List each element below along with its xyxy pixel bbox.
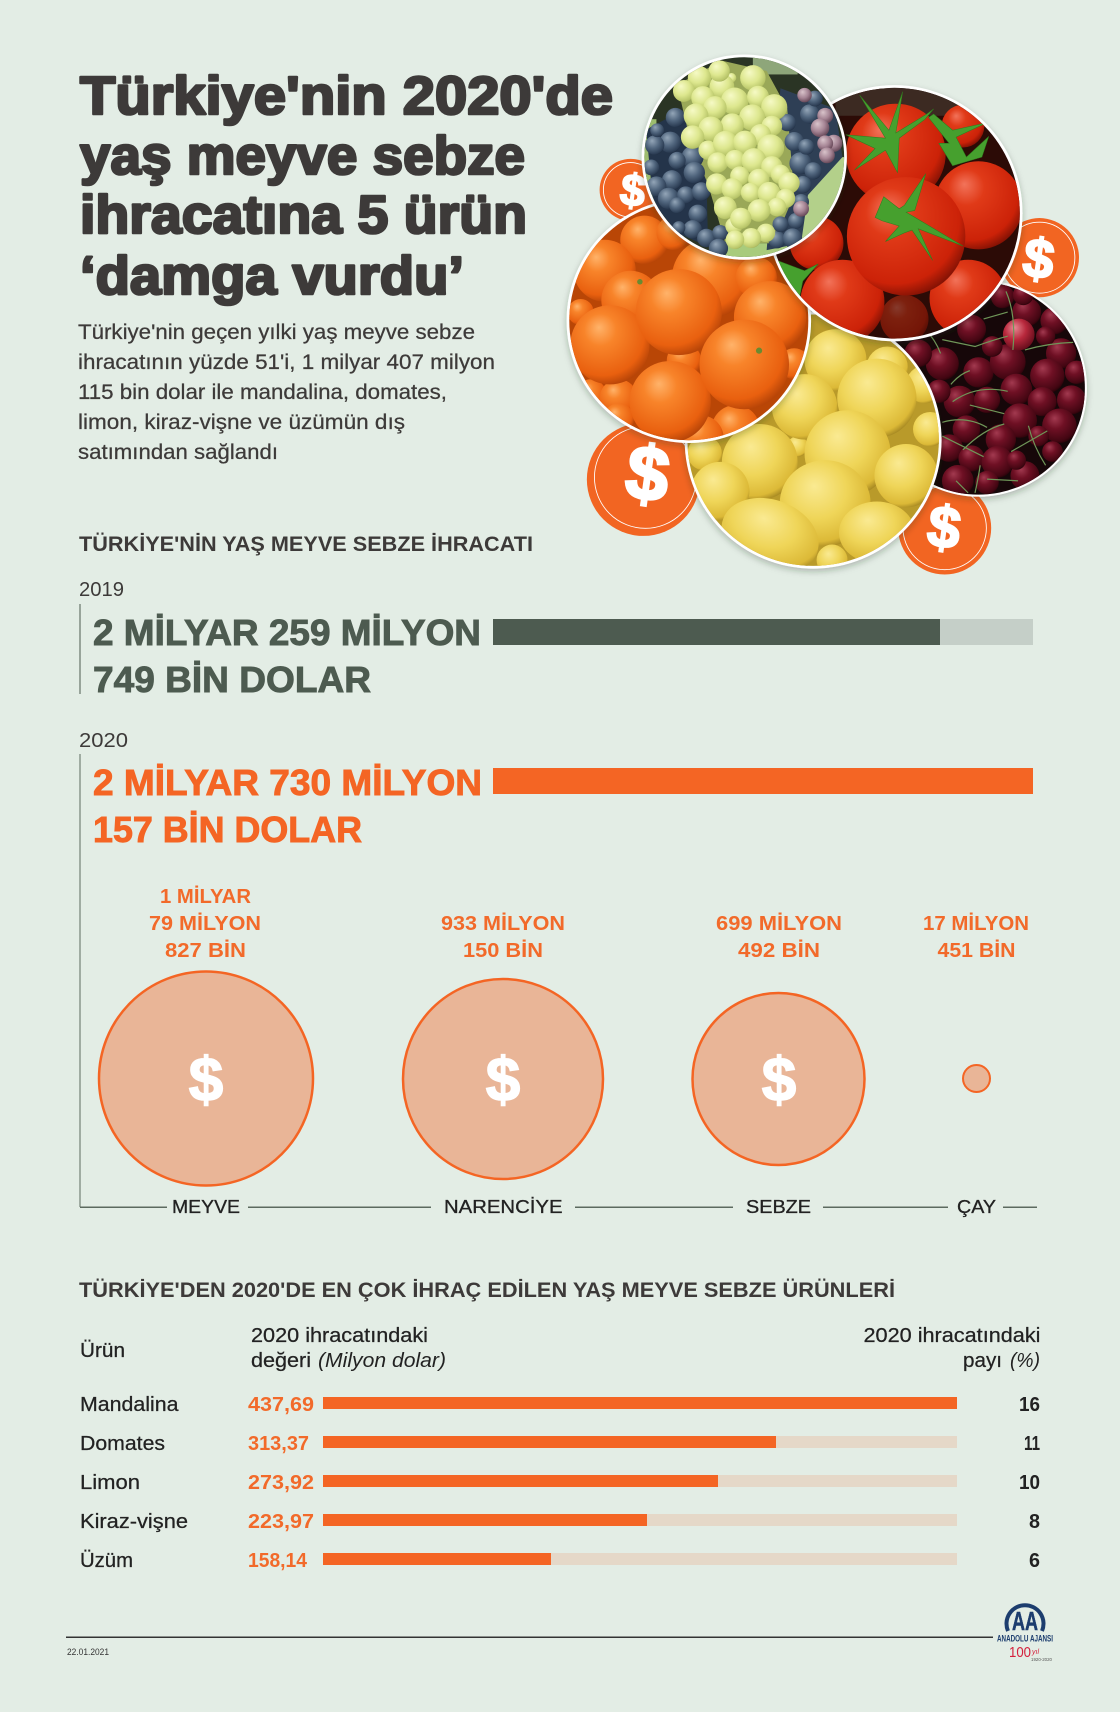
logo: Anadolu Ajansı (997, 1605, 1053, 1662)
intro paragraph: Türkiye'nin geçen yılki yaş meyve sebze (78, 321, 475, 344)
bubble: sebze: 492 BİN (738, 939, 820, 962)
title: Türkiye'nin 2020'de (80, 66, 613, 126)
bubble: meyve: $ (189, 1046, 223, 1115)
bubble: narenciye: NARENCİYE (444, 1197, 562, 1217)
fruit photo collage (567, 54, 1097, 587)
row: üzüm: Üzüm (80, 1550, 133, 1572)
bubble: meyve: 827 BİN (165, 939, 246, 962)
table header: Ürün (80, 1340, 125, 1362)
row: domates (80, 1433, 1040, 1455)
row: mandalina: Mandalina (80, 1394, 179, 1416)
logo: Anadolu Ajansı: AA (1012, 1606, 1038, 1636)
logo: Anadolu Ajansı: ANADOLU AJANSI (997, 1634, 1053, 1644)
photo: mandarins (567, 198, 811, 460)
intro paragraph: satımından sağlandı (78, 441, 278, 464)
table header: (%) (1010, 1350, 1040, 1372)
table header: değeri (251, 1350, 311, 1372)
value 2019: 2 MİLYAR 259 MİLYON (93, 612, 481, 653)
row: domates: 313,37 (248, 1433, 309, 1455)
table header: 2020 ihracatındaki (251, 1325, 428, 1347)
intro paragraph: ihracatının yüzde 51'i, 1 milyar 407 milyon (78, 351, 495, 374)
row: üzüm: 6 (1029, 1550, 1040, 1572)
bubble: meyve (99, 885, 313, 1217)
row: limon: Limon (80, 1472, 140, 1494)
row: mandalina: 437,69 (248, 1394, 314, 1416)
logo: Anadolu Ajansı: yıl (1031, 1649, 1039, 1656)
value 2020: 2 MİLYAR 730 MİLYON (93, 762, 482, 803)
table header: 2020 ihracatındaki (864, 1325, 1040, 1347)
bubble: çay: 17 MİLYON (923, 912, 1029, 935)
bubble: narenciye (403, 912, 603, 1217)
bubble: meyve: 79 MİLYON (149, 912, 261, 935)
row: kiraz-vişne: 8 (1029, 1511, 1040, 1533)
icon: dollar coin bottom right: $ (923, 493, 965, 562)
bubble: narenciye: $ (486, 1046, 520, 1115)
row: limon: 10 (1019, 1472, 1040, 1494)
row: mandalina: 16 (1019, 1394, 1040, 1416)
row: kiraz-vişne (80, 1511, 1040, 1533)
row: kiraz-vişne: 223,97 (248, 1511, 314, 1533)
year label 2020: 2020 (79, 730, 128, 752)
bubble: sebze (692, 912, 864, 1217)
title: yaş meyve sebze (80, 126, 525, 186)
intro paragraph: 115 bin dolar ile mandalina, domates, (78, 381, 447, 404)
photo: lemons (684, 312, 947, 587)
table header: payı (963, 1350, 1002, 1372)
panel: 2019 export value (79, 579, 1033, 700)
heading: top products: TÜRKİYE'DEN 2020'DE EN ÇOK İHRAÇ EDİLEN YAŞ MEYVE SEBZE ÜRÜNLERİ (79, 1277, 895, 1302)
icon: dollar coin top left (600, 159, 662, 221)
icon: dollar coin bottom right (898, 482, 991, 575)
bubble: sebze: 699 MİLYON (716, 912, 842, 935)
row: üzüm: 158,14 (248, 1550, 308, 1572)
row: mandalina (80, 1394, 1040, 1416)
bar 2019 (493, 619, 1033, 645)
bubble: çay: 451 BİN (938, 939, 1016, 962)
value 2020 (93, 762, 482, 850)
bubble: narenciye: 150 BİN (463, 939, 543, 962)
panel: 2020 export value (79, 730, 1033, 850)
row: limon (80, 1472, 1040, 1494)
row: domates: Domates (80, 1433, 165, 1455)
icon: dollar coin top left: $ (617, 164, 649, 217)
bubble chart: 2020 breakdown (99, 885, 1029, 1217)
logo: Anadolu Ajansı: 100 (1009, 1644, 1031, 1661)
photo: cherries (895, 282, 1090, 503)
row: üzüm (80, 1550, 1040, 1572)
value 2019: 749 BİN DOLAR (93, 659, 371, 700)
icon: dollar coin bottom left (587, 423, 700, 536)
bubble: narenciye: 933 MİLYON (441, 912, 565, 935)
bubble: meyve: MEYVE (172, 1197, 240, 1217)
title: ‘damga vurdu’ (80, 246, 464, 306)
bubble: meyve: 1 MİLYAR (160, 885, 251, 908)
bar 2020 (493, 768, 1033, 794)
heading: exports: TÜRKİYE'NİN YAŞ MEYVE SEBZE İHRACATI (79, 531, 533, 556)
title: ihracatına 5 ürün (80, 185, 527, 245)
bubble: çay (923, 912, 1029, 1217)
row: domates: 11 (1024, 1433, 1040, 1455)
bubble: sebze: SEBZE (746, 1197, 811, 1217)
row: limon: 273,92 (248, 1472, 314, 1494)
bubble: çay: ÇAY (957, 1197, 996, 1217)
logo: Anadolu Ajansı: 1920-2020 (1031, 1657, 1052, 1662)
intro paragraph: limon, kiraz-vişne ve üzümün dış (78, 411, 405, 434)
intro paragraph (78, 321, 495, 464)
axis lines (80, 754, 1037, 1208)
value 2019 (93, 612, 481, 700)
bar chart: products (80, 1394, 1040, 1572)
icon: dollar coin right (1000, 218, 1079, 297)
year label 2019: 2019 (79, 579, 124, 601)
footer rule and date: 22.01.2021 (67, 1647, 109, 1657)
title (80, 66, 613, 306)
icon: dollar coin right: $ (1019, 226, 1058, 291)
row: kiraz-vişne: Kiraz-vişne (80, 1511, 188, 1533)
table header (80, 1325, 1040, 1372)
table header: (Milyon dolar) (318, 1350, 446, 1372)
bubble: sebze: $ (762, 1046, 796, 1115)
icon: dollar coin bottom left: $ (621, 429, 675, 519)
photo: grapes (641, 54, 849, 260)
photo: tomatoes (766, 85, 1023, 344)
value 2020: 157 BİN DOLAR (93, 809, 362, 850)
